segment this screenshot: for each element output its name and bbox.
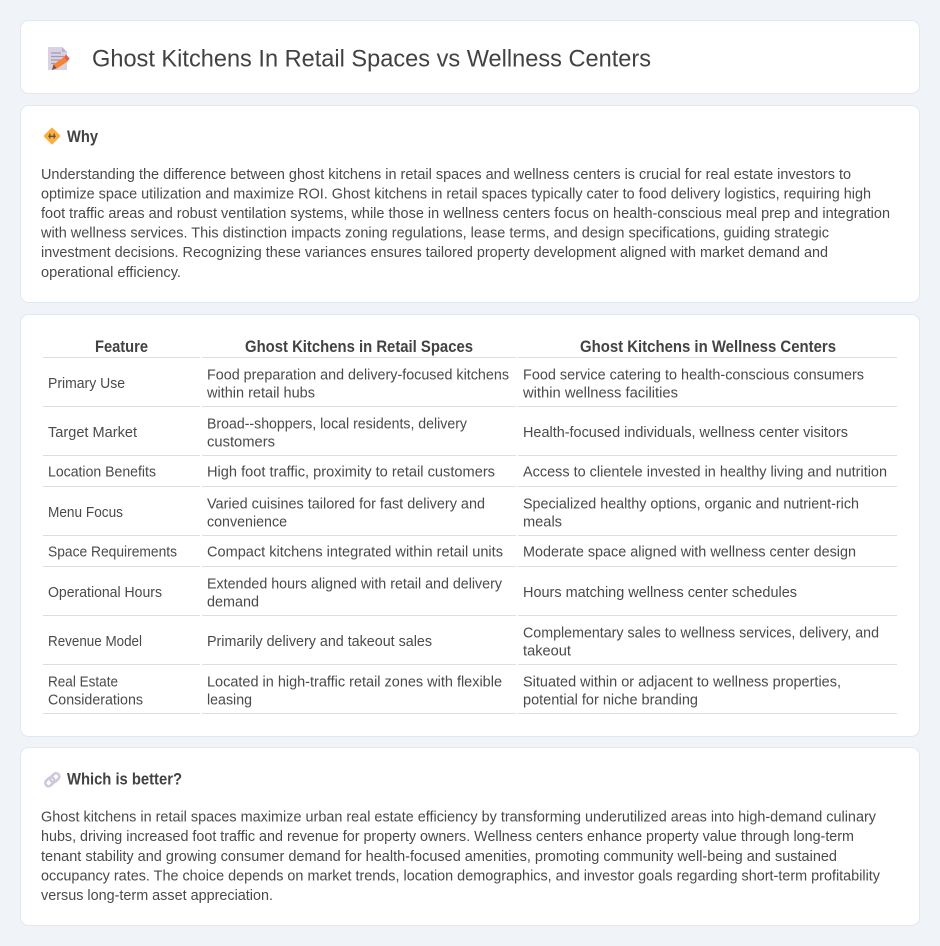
text block: which is better paragraph: tenant stability and growing consumer demand for health-focused amenities, promoting community well-being and sustained xyxy=(41,849,837,865)
text block: why paragraph: with wellness services. This distinction impacts zoning regulations, lease terms, and design specifications, guiding strategic xyxy=(40,226,829,242)
row: primary use xyxy=(48,367,864,401)
text block: why paragraph: Understanding the difference between ghost kitchens in retail spaces and wellness centers is crucial for real estate investors to xyxy=(41,167,851,183)
row: menu focus: meals xyxy=(523,514,562,530)
row: menu focus: Specialized healthy options, organic and nutrient-rich xyxy=(523,496,859,512)
row: revenue model: takeout xyxy=(523,643,571,659)
row: target market: Broad--shoppers, local residents, delivery xyxy=(207,416,468,432)
row: space requirements: Space Requirements xyxy=(48,545,177,561)
row: revenue model: Revenue Model xyxy=(48,634,142,650)
row: location benefits: Access to clientele invested in healthy living and nutrition xyxy=(523,465,887,481)
row: target market: Health-focused individuals, wellness center visitors xyxy=(523,425,848,441)
table rules xyxy=(43,357,897,714)
row: real estate considerations: Located in high-traffic retail zones with flexible xyxy=(207,674,502,690)
row: space requirements: Moderate space aligned with wellness center design xyxy=(523,545,856,561)
row: target market xyxy=(48,416,848,450)
table header xyxy=(95,338,836,356)
heading: which is better: Which is better? xyxy=(67,770,182,788)
row: space requirements xyxy=(48,545,856,561)
text block: which is better paragraph: hubs, driving increased foot traffic and revenue for property owners. Wellness centers enhance property value through long-term xyxy=(41,829,854,845)
icon: warning diamond xyxy=(43,127,61,145)
row: real estate considerations: Real Estate xyxy=(48,674,118,690)
heading: why: Why xyxy=(67,128,98,146)
icon: link xyxy=(44,772,61,788)
row: menu focus: Varied cuisines tailored for fast delivery and xyxy=(207,496,485,512)
panel: why xyxy=(20,106,920,302)
title: Ghost Kitchens In Retail Spaces vs Wellness Centers xyxy=(92,46,651,72)
row: location benefits xyxy=(48,465,887,481)
row: primary use: Food preparation and delivery-focused kitchens xyxy=(207,367,509,383)
row: primary use: within wellness facilities xyxy=(522,385,678,401)
text block: why paragraph: operational efficiency. xyxy=(41,265,181,281)
table header: Ghost Kitchens in Wellness Centers xyxy=(580,338,836,356)
text block: why paragraph: foot traffic areas and robust ventilation systems, while those in wellness centers focus on health-conscious meal prep and integration xyxy=(41,206,890,222)
row: menu focus: Menu Focus xyxy=(48,505,123,521)
row: revenue model: Complementary sales to wellness services, delivery, and xyxy=(523,625,879,641)
row: operational hours: Extended hours aligned with retail and delivery xyxy=(207,576,503,592)
row: real estate considerations: Situated within or adjacent to wellness properties, xyxy=(523,674,841,690)
icon: memo with pencil xyxy=(48,47,70,70)
text block: why paragraph: investment decisions. Recognizing these variances ensures tailored property development aligned with market demand and xyxy=(41,245,828,261)
row: operational hours: Hours matching wellness center schedules xyxy=(523,585,797,601)
row: space requirements: Compact kitchens integrated within retail units xyxy=(207,545,503,561)
panel: comparison table xyxy=(20,314,920,736)
panel: which is better xyxy=(20,748,920,926)
row: location benefits: Location Benefits xyxy=(48,465,156,481)
text block: which is better paragraph: Ghost kitchens in retail spaces maximize urban real estate efficiency by transforming underutilized areas into high-demand culinary xyxy=(41,810,877,826)
text block: which is better paragraph: versus long-term asset appreciation. xyxy=(41,888,273,904)
row: location benefits: High foot traffic, proximity to retail customers xyxy=(207,465,495,481)
text block: which is better paragraph xyxy=(41,810,881,904)
row: revenue model xyxy=(48,625,879,659)
row: operational hours: demand xyxy=(207,594,259,610)
row: real estate considerations: potential for niche branding xyxy=(523,692,698,708)
panel: title card xyxy=(20,20,920,94)
row: real estate considerations xyxy=(48,674,841,708)
row: target market: Target Market xyxy=(48,425,137,441)
table header: Ghost Kitchens in Retail Spaces xyxy=(245,338,473,356)
text block: why paragraph xyxy=(40,167,890,281)
row: primary use: within retail hubs xyxy=(206,385,315,401)
row: primary use: Primary Use xyxy=(48,376,125,392)
row: operational hours: Operational Hours xyxy=(48,585,162,601)
row: real estate considerations: Considerations xyxy=(48,692,143,708)
row: operational hours xyxy=(48,576,797,610)
row: menu focus: convenience xyxy=(207,514,287,530)
row: target market: customers xyxy=(207,434,275,450)
row: menu focus xyxy=(48,496,859,530)
text block: which is better paragraph: occupancy rates. The choice depends on market trends, location demographics, and investor goals regarding short-term profitability xyxy=(41,868,881,884)
table header: Feature xyxy=(95,338,148,356)
text block: why paragraph: optimize space utilization and maximize ROI. Ghost kitchens in retail spaces typically cater to food delivery logistics, requiring high xyxy=(41,186,871,202)
row: real estate considerations: leasing xyxy=(207,692,252,708)
row: revenue model: Primarily delivery and takeout sales xyxy=(207,634,432,650)
row: primary use: Food service catering to health-conscious consumers xyxy=(523,367,864,383)
